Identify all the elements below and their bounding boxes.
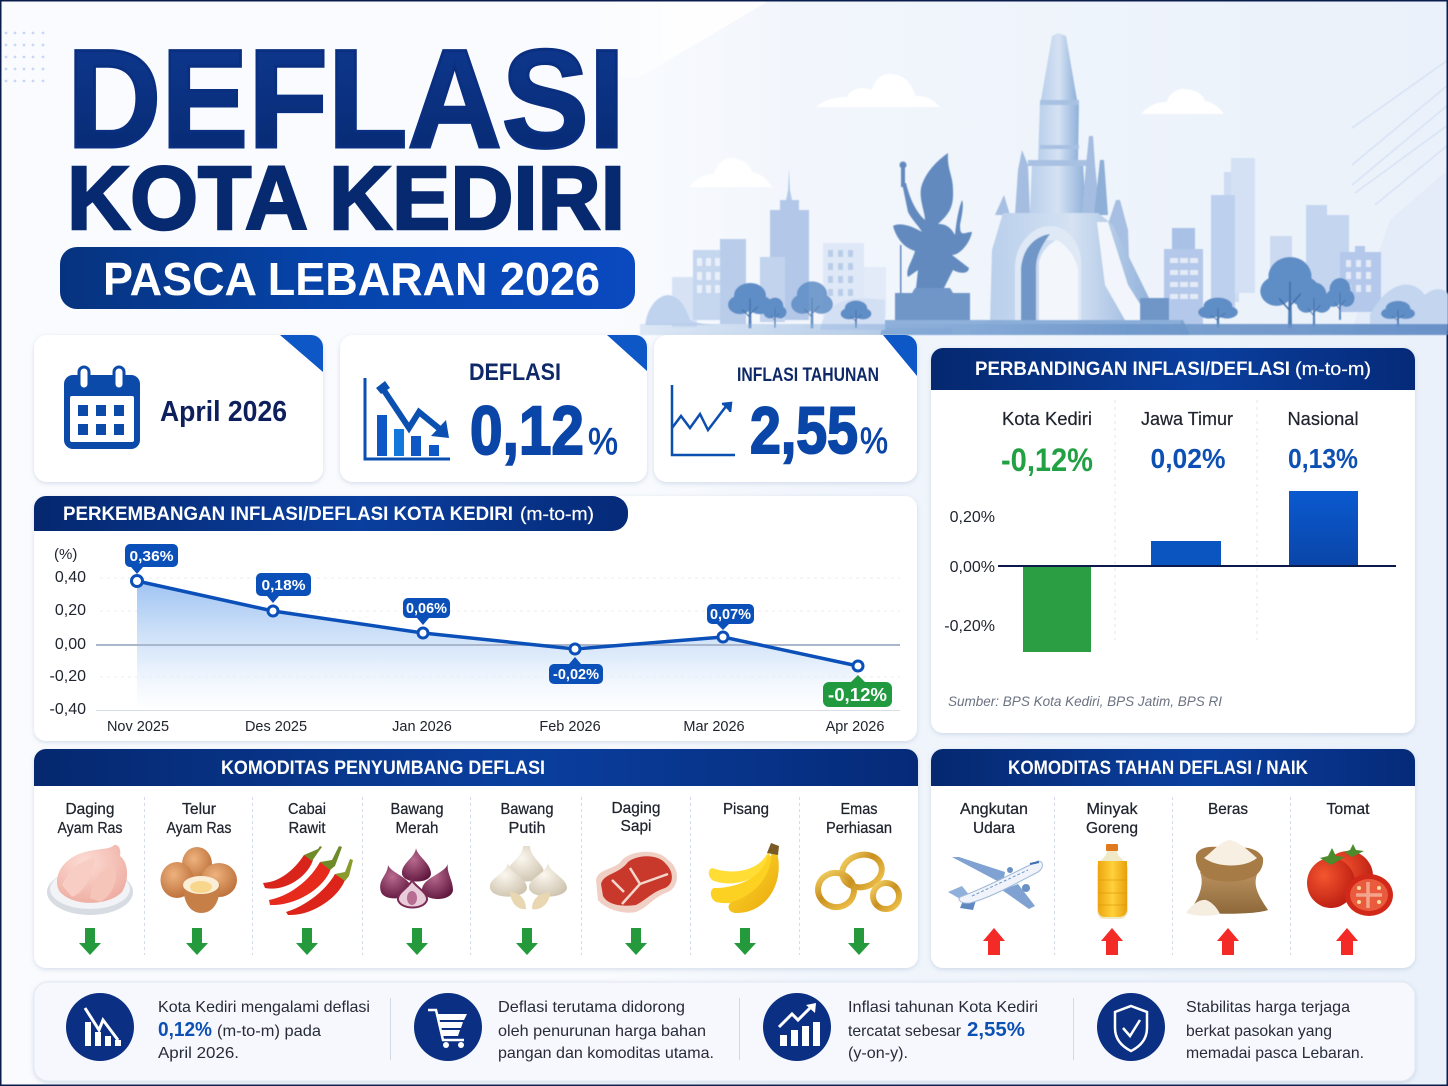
inflasi label: INFLASI TAHUNAN (737, 365, 879, 386)
arrow down (186, 928, 208, 955)
item: minyak goreng (1086, 801, 1138, 955)
icon: garlic (490, 846, 567, 909)
source note: Sumber: BPS Kota Kediri, BPS Jatim, BPS RI (948, 693, 1222, 709)
region names and values: Nasional (1288, 409, 1358, 429)
icon: rising bars (763, 993, 831, 1061)
item: emas perhiasan: Emas (840, 801, 878, 818)
summary 3 (763, 993, 1038, 1062)
arrow down (734, 928, 756, 955)
summary 3: Inflasi tahunan Kota Kediri (848, 999, 1038, 1016)
line chart: Feb 2026 (539, 719, 601, 735)
line chart: -0,20 (50, 668, 86, 685)
icon: oil bottle (1097, 844, 1128, 919)
chart header: PERKEMBANGAN INFLASI/DEFLASI KOTA KEDIRI (63, 504, 513, 525)
item: angkutan udara: Udara (973, 820, 1015, 837)
line chart: (%) (54, 546, 77, 563)
summary 1: Kota Kediri mengalami deflasi (158, 999, 370, 1016)
item: daging sapi: Daging (612, 800, 660, 817)
region names and values: 0,02% (1150, 443, 1226, 474)
bar chart: 0,20% (950, 509, 995, 526)
item: bawang putih (490, 801, 567, 955)
chart header (34, 496, 628, 531)
arrow down (516, 928, 538, 955)
icon: tomatoes (1307, 844, 1393, 916)
icon: airplane (948, 857, 1042, 910)
panel: line chart (34, 496, 917, 741)
line chart: 0,07% (710, 606, 751, 623)
ground strip (640, 324, 1448, 335)
line chart: Mar 2026 (683, 719, 745, 735)
item: tomat (1307, 801, 1393, 955)
deflasi value: % (588, 421, 618, 463)
line chart: 0,36% (130, 548, 174, 565)
card: deflasi (340, 335, 647, 482)
summary 1: (m-to-m) pada (217, 1023, 321, 1040)
icon: chicken (47, 845, 133, 915)
inflasi value: 2,55 (750, 393, 858, 467)
item: beras: Beras (1208, 801, 1248, 818)
summary 4 (1097, 993, 1364, 1062)
summary 4: memadai pasca Lebaran. (1186, 1045, 1364, 1062)
region names and values: Kota Kediri (1002, 409, 1092, 429)
arrow up (983, 928, 1005, 955)
deflation header: KOMODITAS PENYUMBANG DEFLASI (221, 758, 545, 779)
item: telur ayam ras (160, 801, 237, 955)
item: telur ayam ras: Telur (182, 801, 217, 818)
arrow down (296, 928, 318, 955)
arrow down (79, 928, 101, 955)
summary 2: Deflasi terutama didorong (498, 999, 685, 1016)
panel: kesimpulan (34, 982, 1415, 1081)
icon: shopping cart (414, 993, 482, 1061)
dot grid decoration (5, 32, 44, 82)
line chart: -0,12% (828, 685, 887, 705)
arrow down (406, 928, 428, 955)
summary 3: (y-on-y). (848, 1045, 908, 1062)
item: daging ayam ras (47, 801, 133, 955)
summary 2: oleh penurunan harga bahan (498, 1023, 706, 1040)
icon: calendar (64, 367, 140, 449)
inflation header: KOMODITAS TAHAN DEFLASI / NAIK (1008, 758, 1308, 779)
item: bawang putih: Bawang (500, 801, 554, 818)
bar chart: -0,20% (944, 618, 995, 635)
icon: chili (263, 846, 353, 915)
summary 3: tercatat sebesar (848, 1023, 962, 1040)
title: KOTA KEDIRI (67, 149, 625, 249)
line chart: -0,40 (50, 701, 86, 718)
line chart: -0,02% (553, 666, 599, 683)
summary 3: 2,55% (967, 1019, 1025, 1041)
arrow up (1336, 928, 1358, 955)
region names and values: -0,12% (1001, 442, 1093, 478)
statue (885, 153, 985, 328)
summary 2: pangan dan komoditas utama. (498, 1045, 714, 1062)
summary 2 (414, 993, 714, 1062)
region names and values: 0,13% (1288, 443, 1358, 474)
item: emas perhiasan (814, 801, 899, 955)
item: minyak goreng: Goreng (1086, 820, 1138, 837)
title: DEFLASI (67, 20, 625, 177)
icon: beef (596, 852, 677, 913)
icon: falling chart (365, 378, 450, 459)
deflasi value: 0,12 (470, 392, 584, 469)
item: bawang putih: Putih (508, 820, 546, 837)
item: angkutan udara: Angkutan (960, 801, 1028, 818)
icon: rice sack (1186, 840, 1268, 916)
item: pisang (709, 801, 779, 955)
item: pisang: Pisang (723, 801, 769, 818)
panel: perbandingan (931, 348, 1415, 733)
item: daging ayam ras: Ayam Ras (58, 820, 122, 837)
monument tower (880, 33, 1190, 335)
card: inflasi tahunan (654, 335, 917, 482)
summary 4: Stabilitas harga terjaga (1186, 999, 1350, 1016)
item: angkutan udara (948, 801, 1042, 955)
panel: komoditas tahan deflasi (931, 749, 1415, 968)
line chart: Nov 2025 (107, 719, 169, 735)
deflation header (34, 749, 918, 786)
item: daging sapi: Sapi (620, 818, 652, 835)
line chart: Des 2025 (245, 719, 307, 735)
clouds (689, 74, 1224, 187)
icon: rising line chart (672, 385, 735, 455)
summary 1: 0,12% (158, 1019, 212, 1041)
summary 1 (66, 993, 370, 1062)
item: tomat: Tomat (1326, 801, 1370, 818)
region names and values (1001, 409, 1358, 478)
title (67, 20, 625, 249)
item: daging ayam ras: Daging (66, 801, 114, 818)
bar chart: 0,00% (950, 559, 995, 576)
line chart: 0,00 (55, 636, 86, 653)
inflation header (931, 749, 1415, 786)
background buildings (672, 158, 1381, 327)
inflasi value: % (860, 420, 888, 461)
icon: falling bars (66, 993, 134, 1061)
summary 4: berkat pasokan yang (1186, 1023, 1332, 1040)
trees (645, 257, 1448, 330)
comparison header (931, 348, 1415, 390)
arrow up (1217, 928, 1239, 955)
subtitle pill: PASCA LEBARAN 2026 (103, 253, 600, 305)
region names and values: Jawa Timur (1141, 409, 1233, 429)
item: telur ayam ras: Ayam Ras (166, 820, 232, 837)
period text: April 2026 (160, 396, 287, 428)
line chart: Apr 2026 (826, 719, 884, 735)
line chart: 0,18% (262, 577, 306, 594)
item: bawang merah: Bawang (390, 801, 444, 818)
icon: eggs (160, 847, 237, 913)
item: emas perhiasan: Perhiasan (826, 820, 892, 837)
item: daging sapi (596, 800, 677, 955)
item: cabai rawit: Rawit (288, 820, 326, 837)
item: cabai rawit: Cabai (288, 801, 326, 818)
item: beras (1186, 801, 1268, 955)
card: period (34, 335, 323, 482)
item: bawang merah: Merah (396, 820, 438, 837)
summary 1: April 2026. (158, 1045, 239, 1062)
line chart: Jan 2026 (392, 719, 452, 735)
arrow down (625, 928, 647, 955)
icon: shield (1097, 993, 1165, 1061)
chart header: (m-to-m) (520, 504, 594, 524)
item: minyak goreng: Minyak (1086, 801, 1138, 818)
arrow up (1101, 928, 1123, 955)
arrow down (848, 928, 870, 955)
item: cabai rawit (263, 801, 353, 955)
comparison header: PERBANDINGAN INFLASI/DEFLASI (975, 359, 1290, 380)
icon: bananas (709, 843, 779, 913)
icon: gold rings (814, 850, 899, 911)
item: bawang merah (380, 801, 453, 955)
panel: komoditas penyumbang deflasi (34, 749, 918, 968)
deflasi label: DEFLASI (469, 359, 561, 386)
line chart: 0,40 (55, 569, 86, 586)
line chart: 0,20 (55, 602, 86, 619)
line chart: 0,06% (406, 600, 447, 617)
skyline illustration (640, 33, 1448, 335)
comparison header: (m-to-m) (1295, 359, 1371, 379)
bar chart (944, 400, 1396, 652)
icon: shallots (380, 848, 453, 908)
line chart (50, 544, 900, 735)
